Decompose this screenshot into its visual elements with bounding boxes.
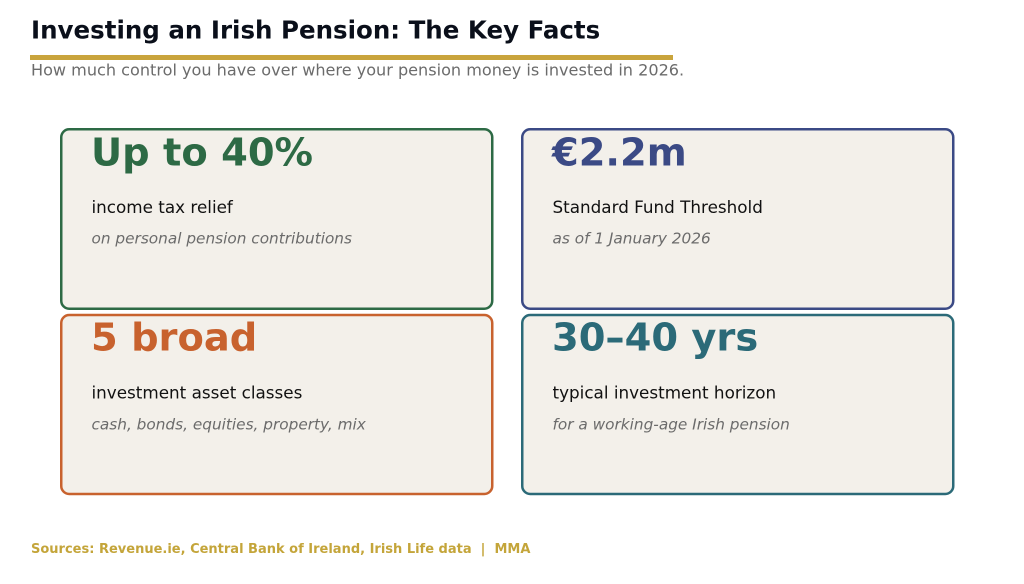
panel: asset classes <box>61 315 492 494</box>
value: Up to 40%: Up to 40% <box>91 130 313 176</box>
label: Standard Fund Threshold: Standard Fund Threshold <box>552 197 763 217</box>
note: cash, bonds, equities, property, mix: cash, bonds, equities, property, mix <box>92 416 367 434</box>
value: €2.2m: €2.2m <box>551 130 687 176</box>
panel: standard fund threshold <box>522 129 953 309</box>
note: as of 1 January 2026: as of 1 January 2026 <box>552 230 711 248</box>
note: on personal pension contributions: on personal pension contributions <box>92 230 352 248</box>
label: income tax relief: income tax relief <box>92 197 234 217</box>
subtitle: How much control you have over where your pension money is invested in 2026. <box>31 61 684 80</box>
note: for a working-age Irish pension: for a working-age Irish pension <box>552 416 790 434</box>
label: investment asset classes: investment asset classes <box>92 383 302 403</box>
panel: income tax relief <box>61 129 492 309</box>
gold title rule <box>30 55 673 60</box>
label: typical investment horizon: typical investment horizon <box>552 383 776 403</box>
sources footer: Sources: Revenue.ie, Central Bank of Ireland, Irish Life data | MMA <box>31 542 530 557</box>
title: Investing an Irish Pension: The Key Facts <box>31 16 600 45</box>
value: 5 broad: 5 broad <box>91 316 257 361</box>
panel: investment horizon <box>522 315 953 494</box>
value: 30–40 yrs: 30–40 yrs <box>552 316 758 361</box>
